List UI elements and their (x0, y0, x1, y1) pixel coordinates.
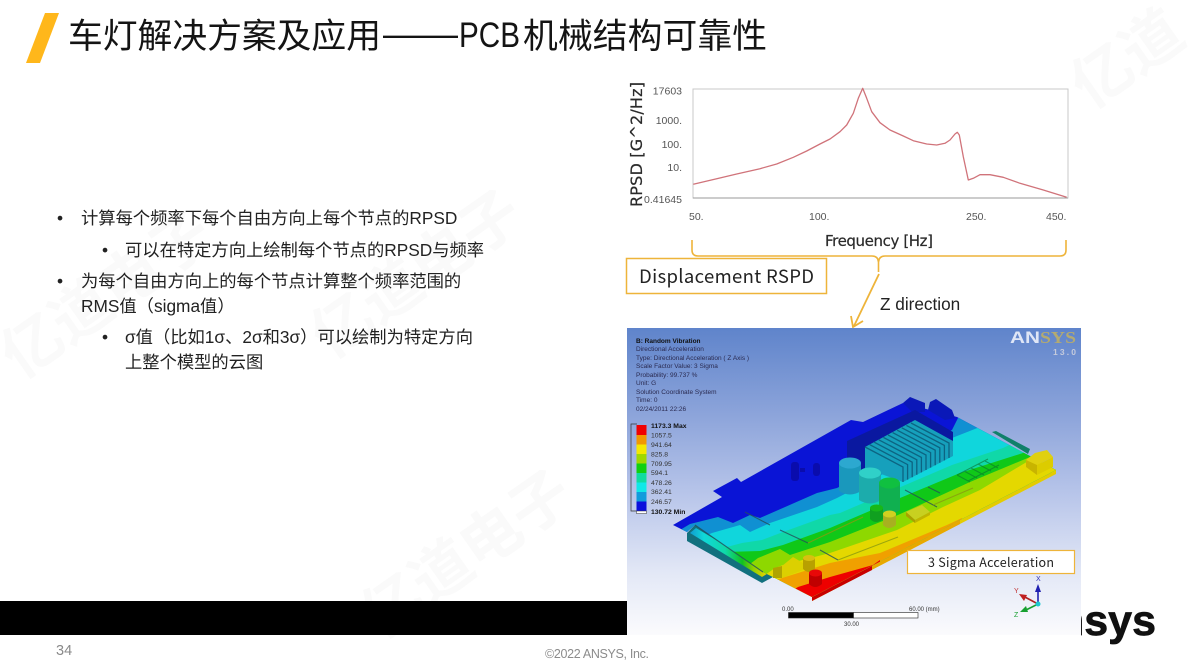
scale bar (782, 607, 940, 628)
colour legend: 941.64 (651, 442, 672, 449)
bullet level 2: • (102, 240, 108, 260)
analysis details: Solution Coordinate System (636, 389, 717, 396)
arrow: to contour plot (851, 274, 879, 327)
y axis tick labels: 17603 (653, 86, 682, 98)
axis triad: Y (1014, 588, 1019, 595)
axis triad: X (1036, 576, 1041, 583)
y axis tick labels (644, 86, 682, 206)
bullet level 1: • (57, 208, 63, 228)
callout: Displacement RSPD (626, 258, 826, 294)
colour legend: 709.95 (651, 461, 672, 468)
analysis details: Probability: 99.737 % (636, 372, 698, 379)
x axis tick labels: 250. (966, 211, 986, 223)
colour legend: 246.57 (651, 499, 672, 506)
watermark: 亿道电子 (299, 178, 534, 371)
callout: 3 Sigma Acceleration: 3 Sigma Acceleration (928, 552, 1054, 571)
bullet list (57, 208, 484, 372)
contour bands (673, 403, 1056, 597)
software logo: SYS (1040, 328, 1076, 347)
board traces (695, 487, 940, 572)
colour legend: 1057.5 (651, 432, 672, 440)
dark components on blue area (791, 462, 820, 481)
top connectors (903, 397, 955, 420)
axis triad: Z (1014, 612, 1019, 619)
colour legend: 825.8 (651, 452, 668, 458)
bullet level 2: • (102, 327, 108, 347)
title: —— (383, 15, 458, 54)
lower tray (687, 525, 773, 583)
scale bar: 30.00 (844, 622, 860, 628)
x axis tick labels (689, 211, 1066, 223)
colour legend: 478.26 (651, 480, 672, 487)
bullet text 1a: 可以在特定方向上绘制每个节点的RPSD与频率 (125, 240, 484, 260)
callout: 3 Sigma Acceleration (908, 550, 1074, 574)
black footer bar (0, 601, 627, 635)
analysis details: B: Random Vibration (636, 338, 701, 345)
colour legend: 1173.3 Max (651, 423, 687, 430)
ANSYS contour plot (627, 328, 1100, 640)
software logo: AN (1010, 328, 1040, 347)
software logo (1010, 328, 1076, 357)
bullet text 2a: σ值（比如1σ、2σ和3σ）可以绘制为特定方向 (125, 327, 473, 347)
colour legend: 362.41 (651, 489, 672, 496)
analysis details: Type: Directional Acceleration ( Z Axis ) (636, 355, 749, 362)
bullet text 2 (81, 271, 461, 316)
title: 机械结构可靠性 (523, 17, 767, 56)
y axis tick labels: 1000. (656, 115, 682, 127)
white mask under plot (1000, 635, 1081, 641)
bullet text 2a (125, 327, 473, 372)
yellow blocks (906, 450, 1053, 523)
x axis title: Frequency [Hz] (825, 232, 933, 250)
y axis tick labels: 0.41645 (644, 194, 682, 206)
connector pin grid (957, 459, 999, 482)
analysis details: Time: 0 (636, 397, 658, 404)
capacitors (803, 458, 900, 587)
x axis tick labels: 50. (689, 211, 704, 223)
icon: yellow title slash (26, 13, 59, 63)
title: PCB (459, 16, 520, 55)
scale bar: 60.00 (mm) (909, 607, 940, 613)
analysis details: Directional Acceleration (636, 346, 704, 353)
left tray block (773, 557, 803, 578)
title (68, 15, 767, 56)
callout: Displacement RSPD: Displacement RSPD (639, 263, 814, 289)
analysis details (636, 338, 749, 413)
colour legend: 130.72 Min (651, 509, 685, 516)
axis triad (1014, 576, 1041, 619)
watermark: 亿道电子 (349, 458, 584, 651)
bullet text 2: 为每个自由方向上的每个节点计算整个频率范围的 (81, 271, 461, 291)
Z direction label: Z direction (880, 294, 960, 314)
page number: 34 (56, 643, 72, 659)
raised plates (808, 488, 973, 560)
bracket under chart (692, 240, 1066, 272)
RPSD line chart (627, 82, 1068, 250)
colour legend: 594.1 (651, 470, 668, 477)
bullet text 1: 计算每个频率下每个自由方向上每个节点的RPSD (81, 208, 457, 228)
board edge (812, 470, 1056, 601)
scale bar: 0.00 (782, 607, 794, 613)
copyright: ©2022 ANSYS, Inc. (545, 647, 649, 661)
title: 车灯解决方案及应用 (68, 17, 381, 56)
PCB model (673, 397, 1056, 601)
heat sink (847, 410, 953, 482)
bullet text 2: RMS值（sigma值） (81, 296, 235, 316)
logo: ansys: ansys (1034, 597, 1156, 645)
bullet text 2a: 上整个模型的云图 (125, 352, 263, 372)
x axis tick labels: 100. (809, 211, 829, 223)
analysis details: Unit: G (636, 380, 656, 387)
x axis tick labels: 450. (1046, 211, 1066, 223)
analysis details: Scale Factor Value: 3 Sigma (636, 363, 718, 370)
software logo: 13.0 (1053, 347, 1076, 357)
colour legend (631, 423, 687, 516)
y axis title: RPSD [G^2/Hz] (627, 82, 646, 207)
y axis tick labels: 10. (667, 162, 682, 174)
y axis tick labels: 100. (662, 139, 682, 151)
bullet level 1: • (57, 271, 63, 291)
analysis details: 02/24/2011 22:26 (636, 406, 687, 413)
green edge strip (992, 431, 1030, 454)
